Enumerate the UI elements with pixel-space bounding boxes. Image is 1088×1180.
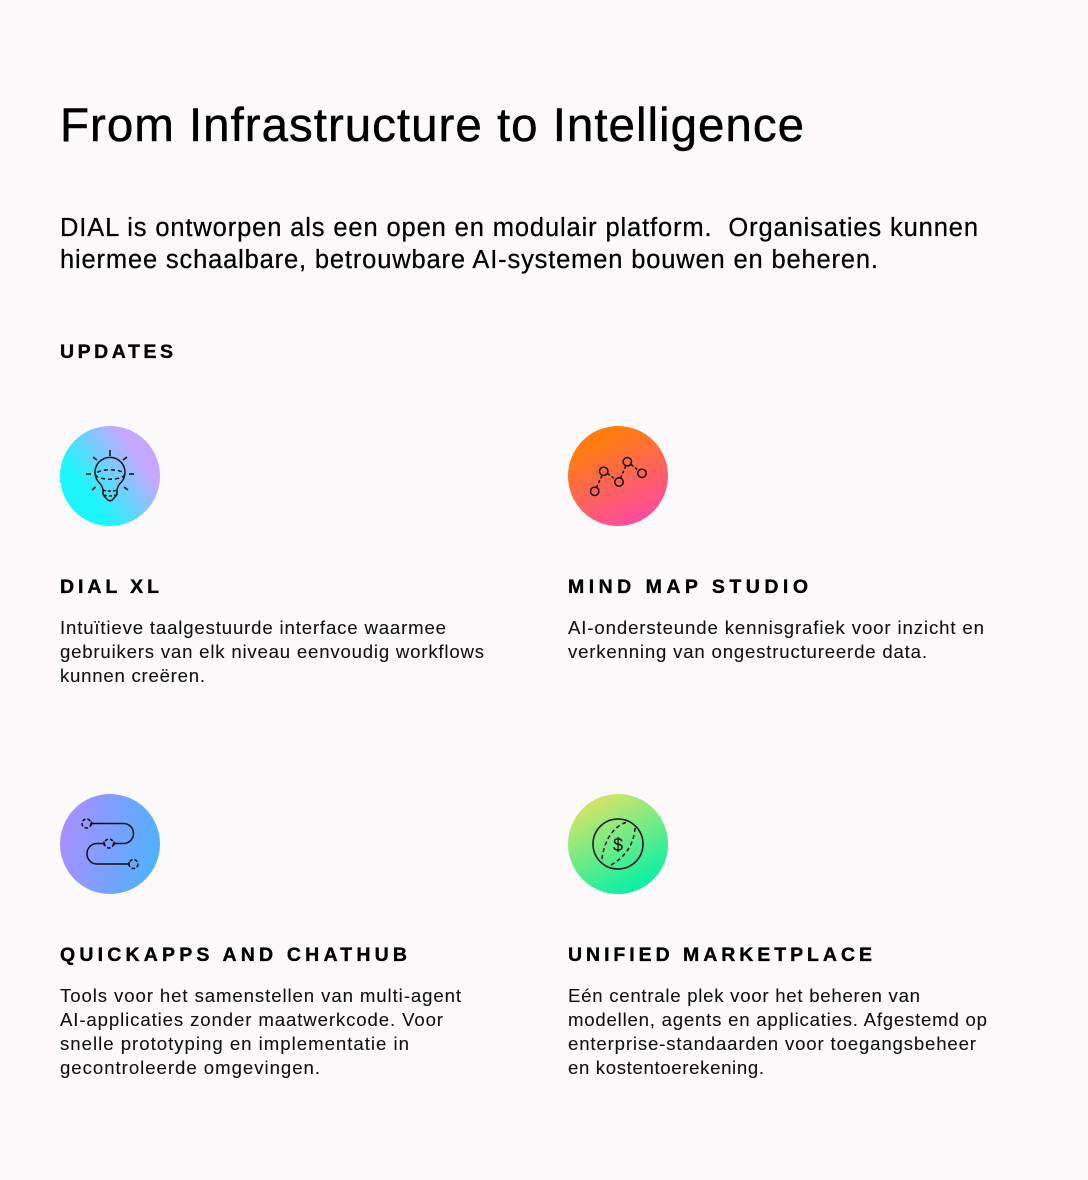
title: From Infrastructure to Intelligence [60, 99, 804, 152]
description [60, 617, 484, 686]
description: verkenning van ongestructureerde data. [568, 641, 927, 662]
heading: MIND MAP STUDIO [568, 576, 808, 598]
description: en kostentoerekening. [568, 1057, 764, 1078]
description: AI-applicaties zonder maatwerkcode. Voor [60, 1009, 443, 1030]
description: enterprise-standaarden voor toegangsbeheer [568, 1033, 976, 1054]
section heading: updates: UPDATES [60, 341, 173, 363]
icon: dollar globe: $ [613, 835, 623, 855]
icon: dollar globe [568, 794, 668, 894]
intro text: hiermee schaalbare, betrouwbare AI-systemen bouwen en beheren. [60, 246, 878, 274]
description: AI-ondersteunde kennisgrafiek voor inzicht en [568, 617, 984, 638]
description [568, 985, 987, 1078]
description: Tools voor het samenstellen van multi-agent [60, 985, 462, 1006]
description [568, 617, 984, 662]
description: gebruikers van elk niveau eenvoudig workflows [60, 641, 484, 662]
heading: DIAL XL [60, 576, 159, 598]
description: modellen, agents en applicaties. Afgestemd op [568, 1009, 987, 1030]
panel: Mind Map Studio [568, 426, 984, 662]
panel: DIAL XL [60, 426, 484, 686]
intro text [60, 214, 978, 274]
heading: QUICKAPPS AND CHATHUB [60, 944, 407, 966]
heading: UNIFIED MARKETPLACE [568, 944, 872, 966]
panel: Unified Marketplace [568, 794, 987, 1078]
panel: QuickApps and ChatHub [60, 794, 462, 1078]
description: gecontroleerde omgevingen. [60, 1057, 320, 1078]
intro text: DIAL is ontworpen als een open en modulair platform. Organisaties kunnen [60, 214, 978, 242]
description: Eén centrale plek voor het beheren van [568, 985, 920, 1006]
icon: workflow path [60, 794, 160, 894]
description: kunnen creëren. [60, 665, 205, 686]
description [60, 985, 462, 1078]
description: snelle prototyping en implementatie in [60, 1033, 409, 1054]
icon: light bulb [60, 426, 160, 526]
icon: connected nodes [568, 426, 668, 526]
description: Intuïtieve taalgestuurde interface waarmee [60, 617, 446, 638]
